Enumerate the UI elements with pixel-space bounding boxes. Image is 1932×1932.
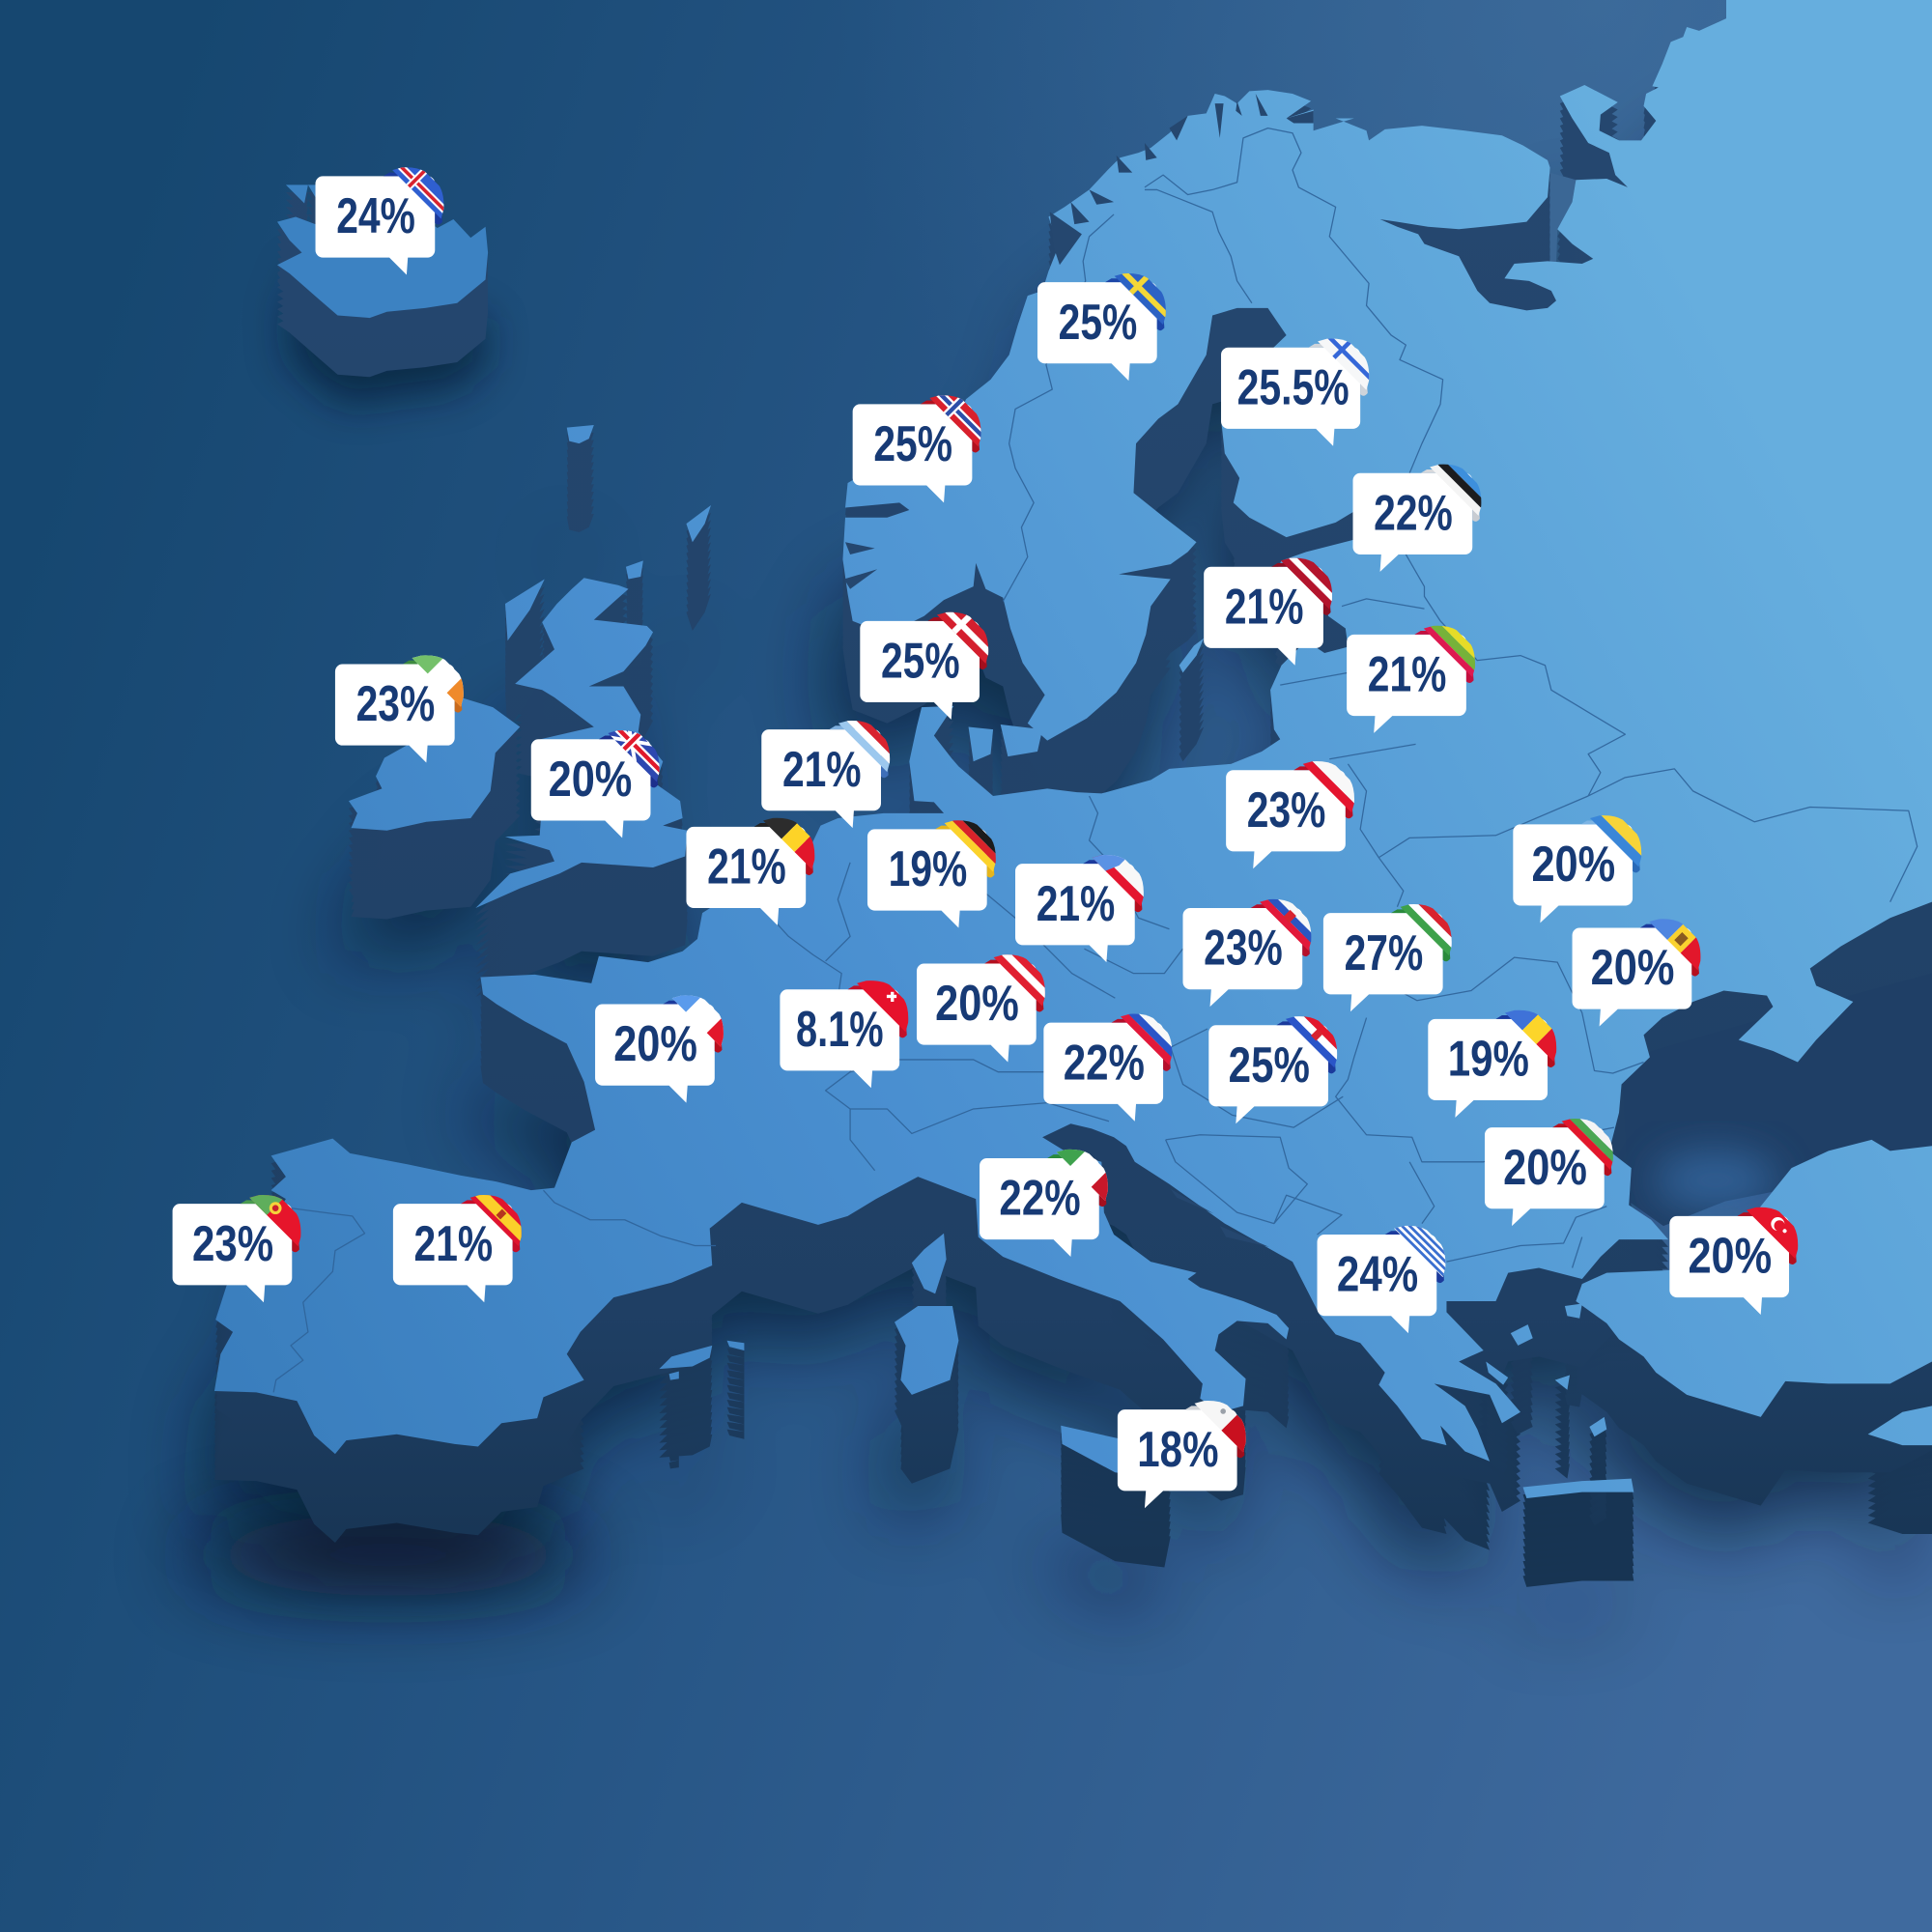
bubble: Romania 19% — [1428, 993, 1574, 1118]
flag ribbon: Germany — [935, 803, 1013, 878]
value: 20% — [1688, 1228, 1772, 1284]
value: 25% — [1229, 1037, 1310, 1093]
value: 24% — [336, 187, 415, 243]
bubble: Poland 23% — [1226, 744, 1372, 868]
value: 22% — [1374, 484, 1453, 540]
value: 21% — [1368, 646, 1446, 702]
flag ribbon: Moldova — [1640, 901, 1718, 977]
value: 23% — [1247, 781, 1325, 838]
value: 21% — [1037, 875, 1115, 931]
bubble: Bulgaria 20% — [1485, 1101, 1631, 1226]
bubble: Greece 24% — [1318, 1208, 1463, 1333]
bubble: Czechia 21% — [1015, 838, 1161, 962]
value: 20% — [1503, 1139, 1587, 1195]
bubble: Ukraine 20% — [1513, 798, 1659, 923]
bubble: United Kingdom 20% — [531, 713, 677, 838]
flag ribbon: Estonia — [1421, 464, 1482, 522]
flag ribbon: Ireland — [403, 638, 481, 713]
flag ribbon: France — [663, 978, 741, 1053]
value: 23% — [192, 1215, 273, 1271]
flag ribbon: Switzerland — [848, 963, 925, 1037]
value: 25% — [1059, 294, 1137, 350]
flag ribbon: Austria — [984, 937, 1063, 1012]
bubble: Estonia 22% — [1352, 464, 1482, 572]
bubble: Slovakia 23% — [1182, 882, 1328, 1007]
bubble: Malta 18% — [1118, 1383, 1264, 1508]
flag ribbon: Italy — [1047, 1132, 1125, 1207]
value: 25.5% — [1237, 358, 1350, 414]
flag ribbon: Lithuania — [1414, 609, 1492, 683]
flag ribbon: Slovenia — [1112, 997, 1189, 1071]
bubble: Ireland 23% — [335, 638, 481, 763]
bubble: Austria 20% — [917, 937, 1063, 1062]
value: 25% — [873, 415, 952, 471]
bubble: Moldova 20% — [1573, 901, 1718, 1026]
bubble: Lithuania 21% — [1347, 609, 1492, 733]
bubble: Sweden 25% — [1037, 273, 1166, 381]
Black Sea soft light — [1654, 1151, 1776, 1210]
flag ribbon: Norway — [921, 395, 981, 452]
value: 21% — [414, 1215, 493, 1271]
value: 19% — [889, 840, 967, 896]
value: 20% — [613, 1015, 697, 1071]
value: 20% — [935, 975, 1019, 1031]
bubble: Croatia 25% — [1208, 999, 1354, 1123]
value: 20% — [1531, 836, 1615, 892]
flag ribbon: Sweden — [1105, 273, 1166, 330]
value: 22% — [1064, 1034, 1145, 1090]
flag ribbon: Turkey — [1737, 1190, 1815, 1264]
flag ribbon: Romania — [1495, 993, 1574, 1067]
flag ribbon: Latvia — [1271, 541, 1350, 615]
drop shadow under the land — [202, 124, 1919, 1622]
value: 21% — [707, 838, 786, 895]
White Sea background strip — [1550, 173, 1576, 267]
flag ribbon: Greece — [1385, 1208, 1463, 1283]
bubble: Finland 25.5% — [1221, 338, 1370, 446]
flag ribbon: Bulgaria — [1552, 1101, 1631, 1176]
bubble: Latvia 21% — [1204, 558, 1333, 666]
bubble: Belgium 21% — [686, 801, 832, 925]
bubble: Portugal 23% — [173, 1178, 318, 1302]
bubble: Hungary 27% — [1323, 887, 1469, 1011]
value: 22% — [999, 1170, 1081, 1226]
value: 18% — [1137, 1421, 1218, 1477]
drop shadow under Iceland — [277, 271, 488, 404]
flag ribbon: Spain — [461, 1178, 539, 1252]
bubble: Iceland 24% — [315, 167, 444, 274]
flag ribbon: Ukraine — [1580, 798, 1659, 872]
flag ribbon: Iceland — [384, 167, 444, 224]
map land surface — [214, 0, 1932, 1498]
flag ribbon: Poland — [1293, 744, 1372, 818]
value: 24% — [1337, 1246, 1418, 1302]
bubble: Italy 22% — [980, 1132, 1125, 1257]
Black Sea dark extrusion — [1622, 974, 1932, 1226]
value: 23% — [1204, 920, 1283, 976]
flag ribbon: Hungary — [1391, 887, 1469, 961]
value: 20% — [1591, 939, 1674, 995]
value: 20% — [549, 751, 632, 807]
flag ribbon: Slovakia — [1251, 882, 1328, 956]
flag ribbon: Portugal — [241, 1178, 318, 1252]
bubble: Netherlands 21% — [761, 703, 907, 828]
value: 27% — [1345, 924, 1423, 980]
value: 21% — [1225, 578, 1303, 634]
value: 25% — [881, 633, 960, 689]
flag ribbon: United Kingdom — [599, 713, 677, 787]
bubble: Germany 19% — [867, 803, 1013, 927]
flag ribbon: Denmark — [927, 595, 1006, 669]
flag ribbon: Croatia — [1276, 999, 1354, 1073]
fjords along the Norwegian coast — [844, 94, 1314, 1247]
bubble: Denmark 25% — [860, 595, 1006, 720]
bubble: France 20% — [595, 978, 741, 1103]
flag ribbon: Czechia — [1083, 838, 1161, 912]
flag ribbon: Netherlands — [829, 703, 907, 778]
bubble: Slovenia 22% — [1043, 997, 1189, 1122]
value: 21% — [782, 741, 862, 797]
country borders — [273, 128, 1918, 1392]
flag ribbon: Malta — [1185, 1383, 1264, 1458]
value: 19% — [1448, 1031, 1529, 1087]
value: 8.1% — [796, 1001, 884, 1057]
bubble: Turkey 20% — [1669, 1190, 1815, 1315]
flag ribbon: Finland — [1309, 338, 1370, 396]
dark shadow pool under Iberia — [185, 1513, 591, 1597]
bubble: Norway 25% — [852, 395, 981, 502]
map extrusion sides — [214, 8, 1932, 1587]
Iceland surface — [277, 185, 488, 318]
bubble: Switzerland 8.1% — [780, 963, 925, 1088]
flag ribbon: Belgium — [754, 801, 832, 875]
bubble: Spain 21% — [393, 1178, 539, 1302]
value: 23% — [356, 675, 435, 731]
